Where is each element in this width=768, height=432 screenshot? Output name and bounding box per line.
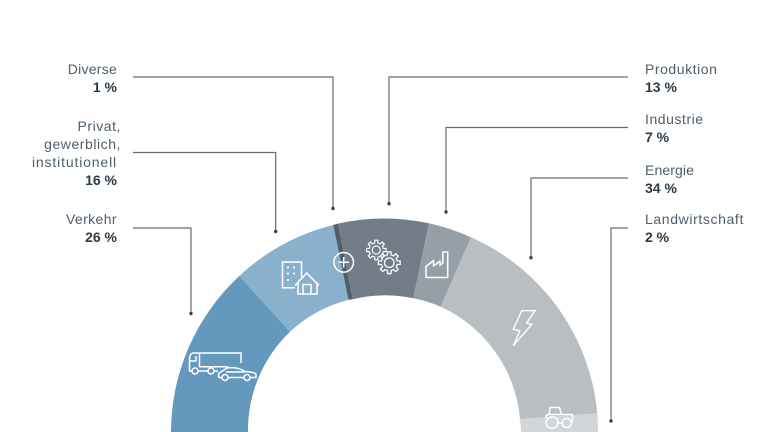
label: Energie 34 %: 34 % [645, 180, 677, 196]
segment: Verkehr [171, 276, 290, 432]
label: Produktion 13 %: 13 % [645, 79, 677, 95]
label: Privat, gewerblich, institutionell 16 %: Privat, [77, 118, 121, 134]
label: Energie 34 % [645, 162, 694, 196]
label: Verkehr 26 %: Verkehr [66, 211, 117, 227]
small gear [367, 240, 386, 260]
leader line: Diverse [133, 77, 335, 210]
label: Diverse 1 %: Diverse [68, 61, 117, 77]
icon: gears [367, 240, 400, 274]
label: Landwirtschaft 2 %: Landwirtschaft [645, 211, 744, 227]
leader line: Energie [529, 178, 628, 259]
label: Produktion 13 % [645, 61, 717, 95]
leader line: Industrie [444, 128, 628, 214]
label: Energie 34 %: Energie [645, 162, 694, 178]
segment: Energie [441, 237, 597, 419]
leader line: Privat [133, 152, 277, 233]
label: Privat, gewerblich, institutionell 16 %: gewerblich, [44, 136, 121, 152]
label: Verkehr 26 % [66, 211, 117, 245]
label: Produktion 13 %: Produktion [645, 61, 717, 77]
label: Landwirtschaft 2 % [645, 211, 744, 245]
label: Industrie 7 %: Industrie [645, 111, 704, 127]
icon: truck and car [190, 353, 256, 380]
icon: factory [426, 252, 448, 278]
label: Privat, gewerblich, institutionell 16 %: institutionell [32, 154, 117, 170]
leader line: Verkehr [133, 228, 193, 315]
label: Industrie 7 % [645, 111, 704, 145]
leader line: Landwirtschaft [609, 228, 628, 423]
label: Privat, gewerblich, institutionell 16 %: 16 % [85, 172, 117, 188]
large gear [378, 252, 400, 274]
icon: office building and house [282, 262, 319, 294]
segment: Industrie [413, 223, 471, 307]
segment: Produktion [338, 219, 429, 299]
icon: tractor [546, 408, 572, 428]
icon: lightning bolt [513, 311, 535, 346]
label: Verkehr 26 %: 26 % [85, 229, 117, 245]
label: Landwirtschaft 2 %: 2 % [645, 229, 669, 245]
label: Diverse 1 % [68, 61, 117, 95]
icon: plus in circle [334, 252, 354, 272]
label: Industrie 7 %: 7 % [645, 129, 669, 145]
segment: Diverse [333, 224, 353, 300]
segment: Privat, gewerblich, institutionell [239, 225, 348, 332]
leader line: Produktion [387, 77, 628, 205]
label: Diverse 1 %: 1 % [93, 79, 117, 95]
segment: Landwirtschaft [520, 413, 598, 432]
label: Privat, gewerblich, institutionell 16 % [32, 118, 121, 188]
